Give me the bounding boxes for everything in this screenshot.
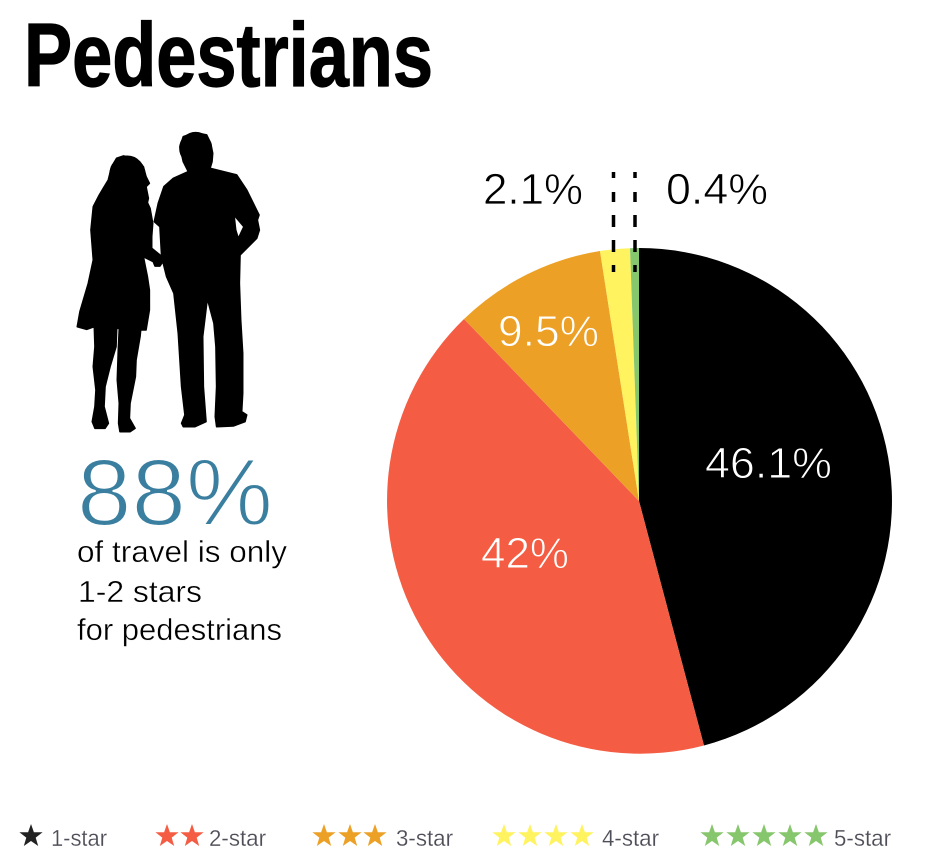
leader line: 0.4% <box>633 172 637 272</box>
label: 2.1%: 2.1% <box>483 165 583 214</box>
label: 9.5%: 9.5% <box>498 307 599 356</box>
legend: 2-star <box>155 824 266 851</box>
legend: 3-star <box>312 824 453 851</box>
slice: 5-star 0.4% <box>630 248 639 501</box>
label: 46.1%: 46.1% <box>705 439 832 488</box>
title: Pedestrians <box>24 6 433 106</box>
legend: 5-star: 5-star <box>834 825 891 851</box>
label: 42%: 42% <box>481 529 569 578</box>
legend: 5-star <box>700 824 891 851</box>
legend: 1-star <box>19 824 107 851</box>
legend: 1-star: 1-star <box>51 825 107 851</box>
legend: 3-star: 3-star <box>396 825 453 851</box>
pie chart <box>387 248 892 754</box>
label: 0.4%: 0.4% <box>666 165 768 214</box>
icon: woman <box>77 156 163 432</box>
stat description <box>77 534 287 647</box>
slice: 1-star 46.1% <box>639 248 892 746</box>
icon: man <box>154 133 259 427</box>
legend: 4-star: 4-star <box>602 825 659 851</box>
big stat: 88%: 88% <box>77 440 273 546</box>
icon: couple silhouette <box>77 133 259 432</box>
legend <box>19 824 891 851</box>
slice: 2-star 42% <box>387 319 704 754</box>
slice: 4-star 2.1% <box>600 248 639 501</box>
legend: 2-star: 2-star <box>209 825 266 851</box>
legend: 4-star <box>492 824 659 851</box>
stat description: for pedestrians <box>77 612 282 647</box>
leader line: 2.1% <box>612 172 615 272</box>
slice: 3-star 9.5% <box>464 251 639 501</box>
stat description: of travel is only <box>77 534 287 569</box>
stat description: 1-2 stars <box>78 574 202 609</box>
